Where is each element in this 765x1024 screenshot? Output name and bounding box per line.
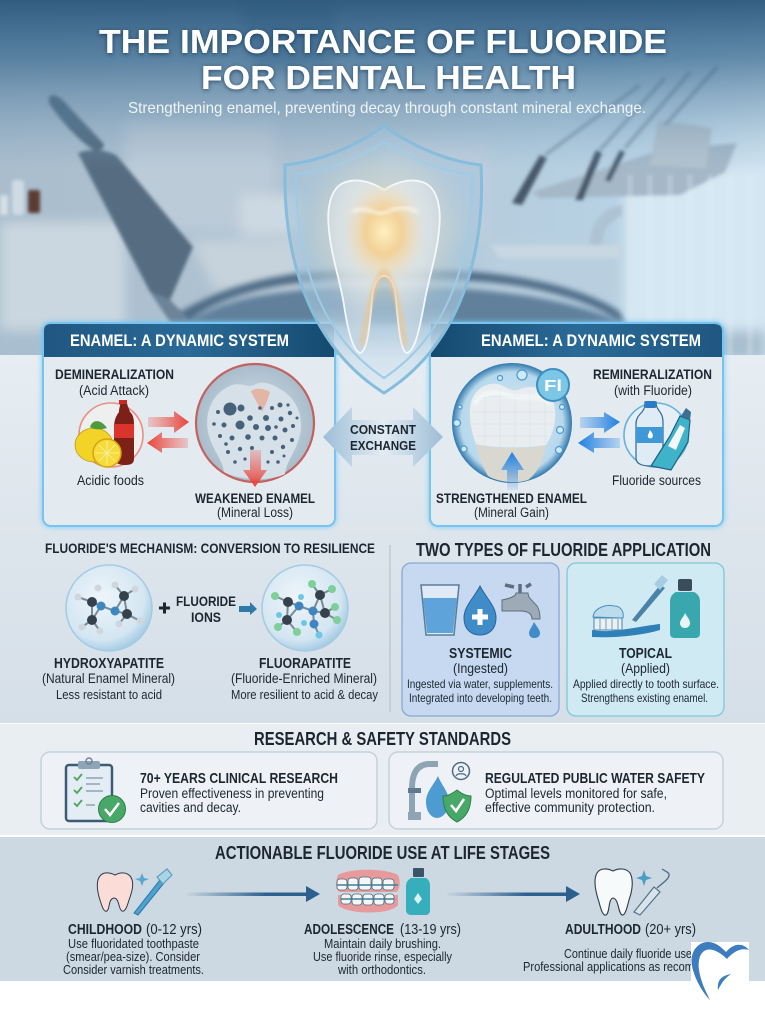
childhood text: (smear/pea-size). Consider xyxy=(66,950,200,964)
strengthened enamel label xyxy=(436,490,587,520)
adulthood text: ADULTHOOD xyxy=(565,922,641,938)
header text: ENAMEL: A DYNAMIC SYSTEM xyxy=(70,331,289,350)
title: FOR DENTAL HEALTH xyxy=(201,59,576,96)
icon: water bottle and toothpaste xyxy=(624,401,691,470)
childhood text: CHILDHOOD xyxy=(68,922,142,938)
hydroxyapatite labels: Less resistant to acid xyxy=(56,688,162,702)
application heading: TWO TYPES OF FLUORIDE APPLICATION xyxy=(416,540,711,560)
topical text: (Applied) xyxy=(621,660,670,676)
panel: fluoride mechanism xyxy=(42,540,379,702)
arrow: constant exchange: CONSTANT xyxy=(350,422,416,437)
remineralization label xyxy=(593,366,712,398)
demineralization label: DEMINERALIZATION xyxy=(55,366,174,382)
strengthened enamel label: (Mineral Gain) xyxy=(474,505,549,520)
icon: pink tooth and toothbrush xyxy=(97,869,172,915)
fluoride ions label: FLUORIDE xyxy=(176,593,236,609)
fluorapatite labels: FLUORAPATITE xyxy=(259,656,351,672)
adolescence text: Use fluoride rinse, especially xyxy=(313,950,453,964)
panel: remineralization xyxy=(430,323,723,526)
hydroxyapatite labels: (Natural Enamel Mineral) xyxy=(42,670,175,686)
card: public water safety xyxy=(389,752,723,829)
icon: tap xyxy=(502,584,540,638)
card: systemic xyxy=(402,563,559,716)
icon: strengthened enamel tooth xyxy=(452,363,572,483)
icon: toothbrush with paste xyxy=(592,575,668,637)
panel header xyxy=(44,324,334,357)
weakened enamel label: WEAKENED ENAMEL xyxy=(195,490,315,506)
water safety text: Optimal levels monitored for safe, xyxy=(485,786,667,801)
adulthood text: (20+ yrs) xyxy=(645,922,696,938)
panel: types of fluoride application xyxy=(402,540,724,716)
arrow: adolescence to adulthood xyxy=(446,886,580,902)
icon: weakened enamel tooth xyxy=(196,364,314,482)
header text: ENAMEL: A DYNAMIC SYSTEM xyxy=(481,331,701,350)
systemic text: (Ingested) xyxy=(453,660,508,676)
arrow: away from enamel xyxy=(147,432,188,453)
icon: hydroxyapatite molecule xyxy=(66,565,152,651)
icon: fluorapatite molecule xyxy=(262,565,348,651)
fluoride ions label: IONS xyxy=(191,609,221,625)
remineralization label: REMINERALIZATION xyxy=(593,366,712,382)
adulthood text: Professional applications as recommended. xyxy=(523,960,737,974)
card: clinical research xyxy=(41,752,377,829)
strengthened enamel label: STRENGTHENED ENAMEL xyxy=(436,490,587,506)
topical text: TOPICAL xyxy=(619,646,672,662)
panel: research and safety standards xyxy=(41,729,723,829)
adolescence text: (13-19 yrs) xyxy=(400,922,461,938)
research heading: RESEARCH & SAFETY STANDARDS xyxy=(254,729,511,749)
topical text xyxy=(573,646,719,705)
arrow: toward enamel xyxy=(148,411,189,433)
arrow: mineral gain xyxy=(501,452,524,490)
icon: clipboard with check xyxy=(66,758,126,822)
arrow: toward enamel xyxy=(580,412,620,433)
stage: adulthood xyxy=(523,869,737,974)
icon: braces and mouthwash xyxy=(336,868,430,915)
icon: glowing tooth xyxy=(314,160,454,353)
section background: mineral and application area xyxy=(0,355,765,723)
card: topical xyxy=(567,563,724,716)
adolescence text xyxy=(304,922,461,977)
panel: life stages xyxy=(63,843,737,977)
life stages heading: ACTIONABLE FLUORIDE USE AT LIFE STAGES xyxy=(215,843,550,863)
title: THE IMPORTANCE OF FLUORIDE xyxy=(99,23,667,60)
icon: fluoride ion badge: Fl xyxy=(544,378,562,395)
research text: Proven effectiveness in preventing xyxy=(140,786,324,801)
icon: drop with plus xyxy=(464,586,496,635)
logo: blue tooth mark xyxy=(691,942,749,1000)
adolescence text: with orthodontics. xyxy=(337,963,426,977)
childhood text: Use fluoridated toothpaste xyxy=(68,937,199,951)
arrow: childhood to adolescence xyxy=(185,886,320,902)
section background: research and safety xyxy=(0,724,765,835)
panel frame xyxy=(430,323,723,526)
arrow: conversion xyxy=(239,602,257,615)
hydroxyapatite labels: HYDROXYAPATITE xyxy=(54,656,164,672)
fluorapatite labels: More resilient to acid & decay xyxy=(231,688,379,702)
childhood text: Consider varnish treatments. xyxy=(63,963,204,977)
demineralization label: (Acid Attack) xyxy=(79,383,149,398)
mechanism heading: FLUORIDE'S MECHANISM: CONVERSION TO RESILIENCE xyxy=(45,540,375,556)
icon: mouthwash bottle xyxy=(670,579,700,638)
subtitle: Strengthening enamel, preventing decay through constant mineral exchange. xyxy=(128,100,646,117)
adulthood text xyxy=(523,922,737,974)
systemic text: Ingested via water, supplements. xyxy=(407,677,553,691)
icon: water glass xyxy=(421,585,459,635)
arrow: mineral loss xyxy=(243,450,267,487)
fluoride sources label: Fluoride sources xyxy=(612,473,701,488)
stage: adolescence xyxy=(304,868,461,977)
remineralization label: (with Fluoride) xyxy=(614,383,692,398)
weakened enamel label xyxy=(195,490,315,520)
panel: demineralization xyxy=(43,323,335,526)
topical text: Applied directly to tooth surface. xyxy=(573,677,719,691)
water safety text: REGULATED PUBLIC WATER SAFETY xyxy=(485,770,705,787)
fluorapatite labels xyxy=(231,656,379,702)
icon: white tooth and dental tool xyxy=(595,869,669,915)
adolescence text: ADOLESCENCE xyxy=(304,922,394,938)
icon: lemon and cola xyxy=(75,400,143,467)
research text: 70+ YEARS CLINICAL RESEARCH xyxy=(140,770,338,787)
arrow: constant exchange: EXCHANGE xyxy=(350,438,416,453)
childhood text: (0-12 yrs) xyxy=(146,922,202,938)
section background: life stages xyxy=(0,837,765,981)
background photo: dental clinic xyxy=(0,0,765,360)
weakened enamel label: (Mineral Loss) xyxy=(217,505,293,520)
panel header xyxy=(431,324,722,357)
fluorapatite labels: (Fluoride-Enriched Mineral) xyxy=(231,670,377,686)
plus sign xyxy=(159,602,170,614)
arrow: from sources xyxy=(578,432,620,453)
fluoride ions label xyxy=(176,593,236,625)
arrow: constant exchange xyxy=(323,407,443,467)
systemic text xyxy=(407,646,553,705)
systemic text: Integrated into developing teeth. xyxy=(409,691,552,705)
research text: cavities and decay. xyxy=(140,800,241,815)
childhood text xyxy=(63,922,204,977)
water safety text xyxy=(485,770,705,815)
demineralization label xyxy=(55,366,174,398)
panel frame xyxy=(43,323,335,526)
title xyxy=(99,23,667,96)
icon: protective shield xyxy=(285,126,482,393)
adolescence text: Maintain daily brushing. xyxy=(324,937,441,951)
icon: fluoride ion badge xyxy=(537,369,569,401)
acidic foods label: Acidic foods xyxy=(77,473,144,488)
research text xyxy=(140,770,338,815)
water safety text: effective community protection. xyxy=(485,800,655,815)
icon: water pipe, drop and shield xyxy=(408,762,471,822)
adulthood text: Continue daily fluoride use. xyxy=(564,947,695,961)
stage: childhood xyxy=(63,869,204,977)
hydroxyapatite labels xyxy=(42,656,175,702)
systemic text: SYSTEMIC xyxy=(449,646,512,662)
topical text: Strengthens existing enamel. xyxy=(581,691,708,705)
